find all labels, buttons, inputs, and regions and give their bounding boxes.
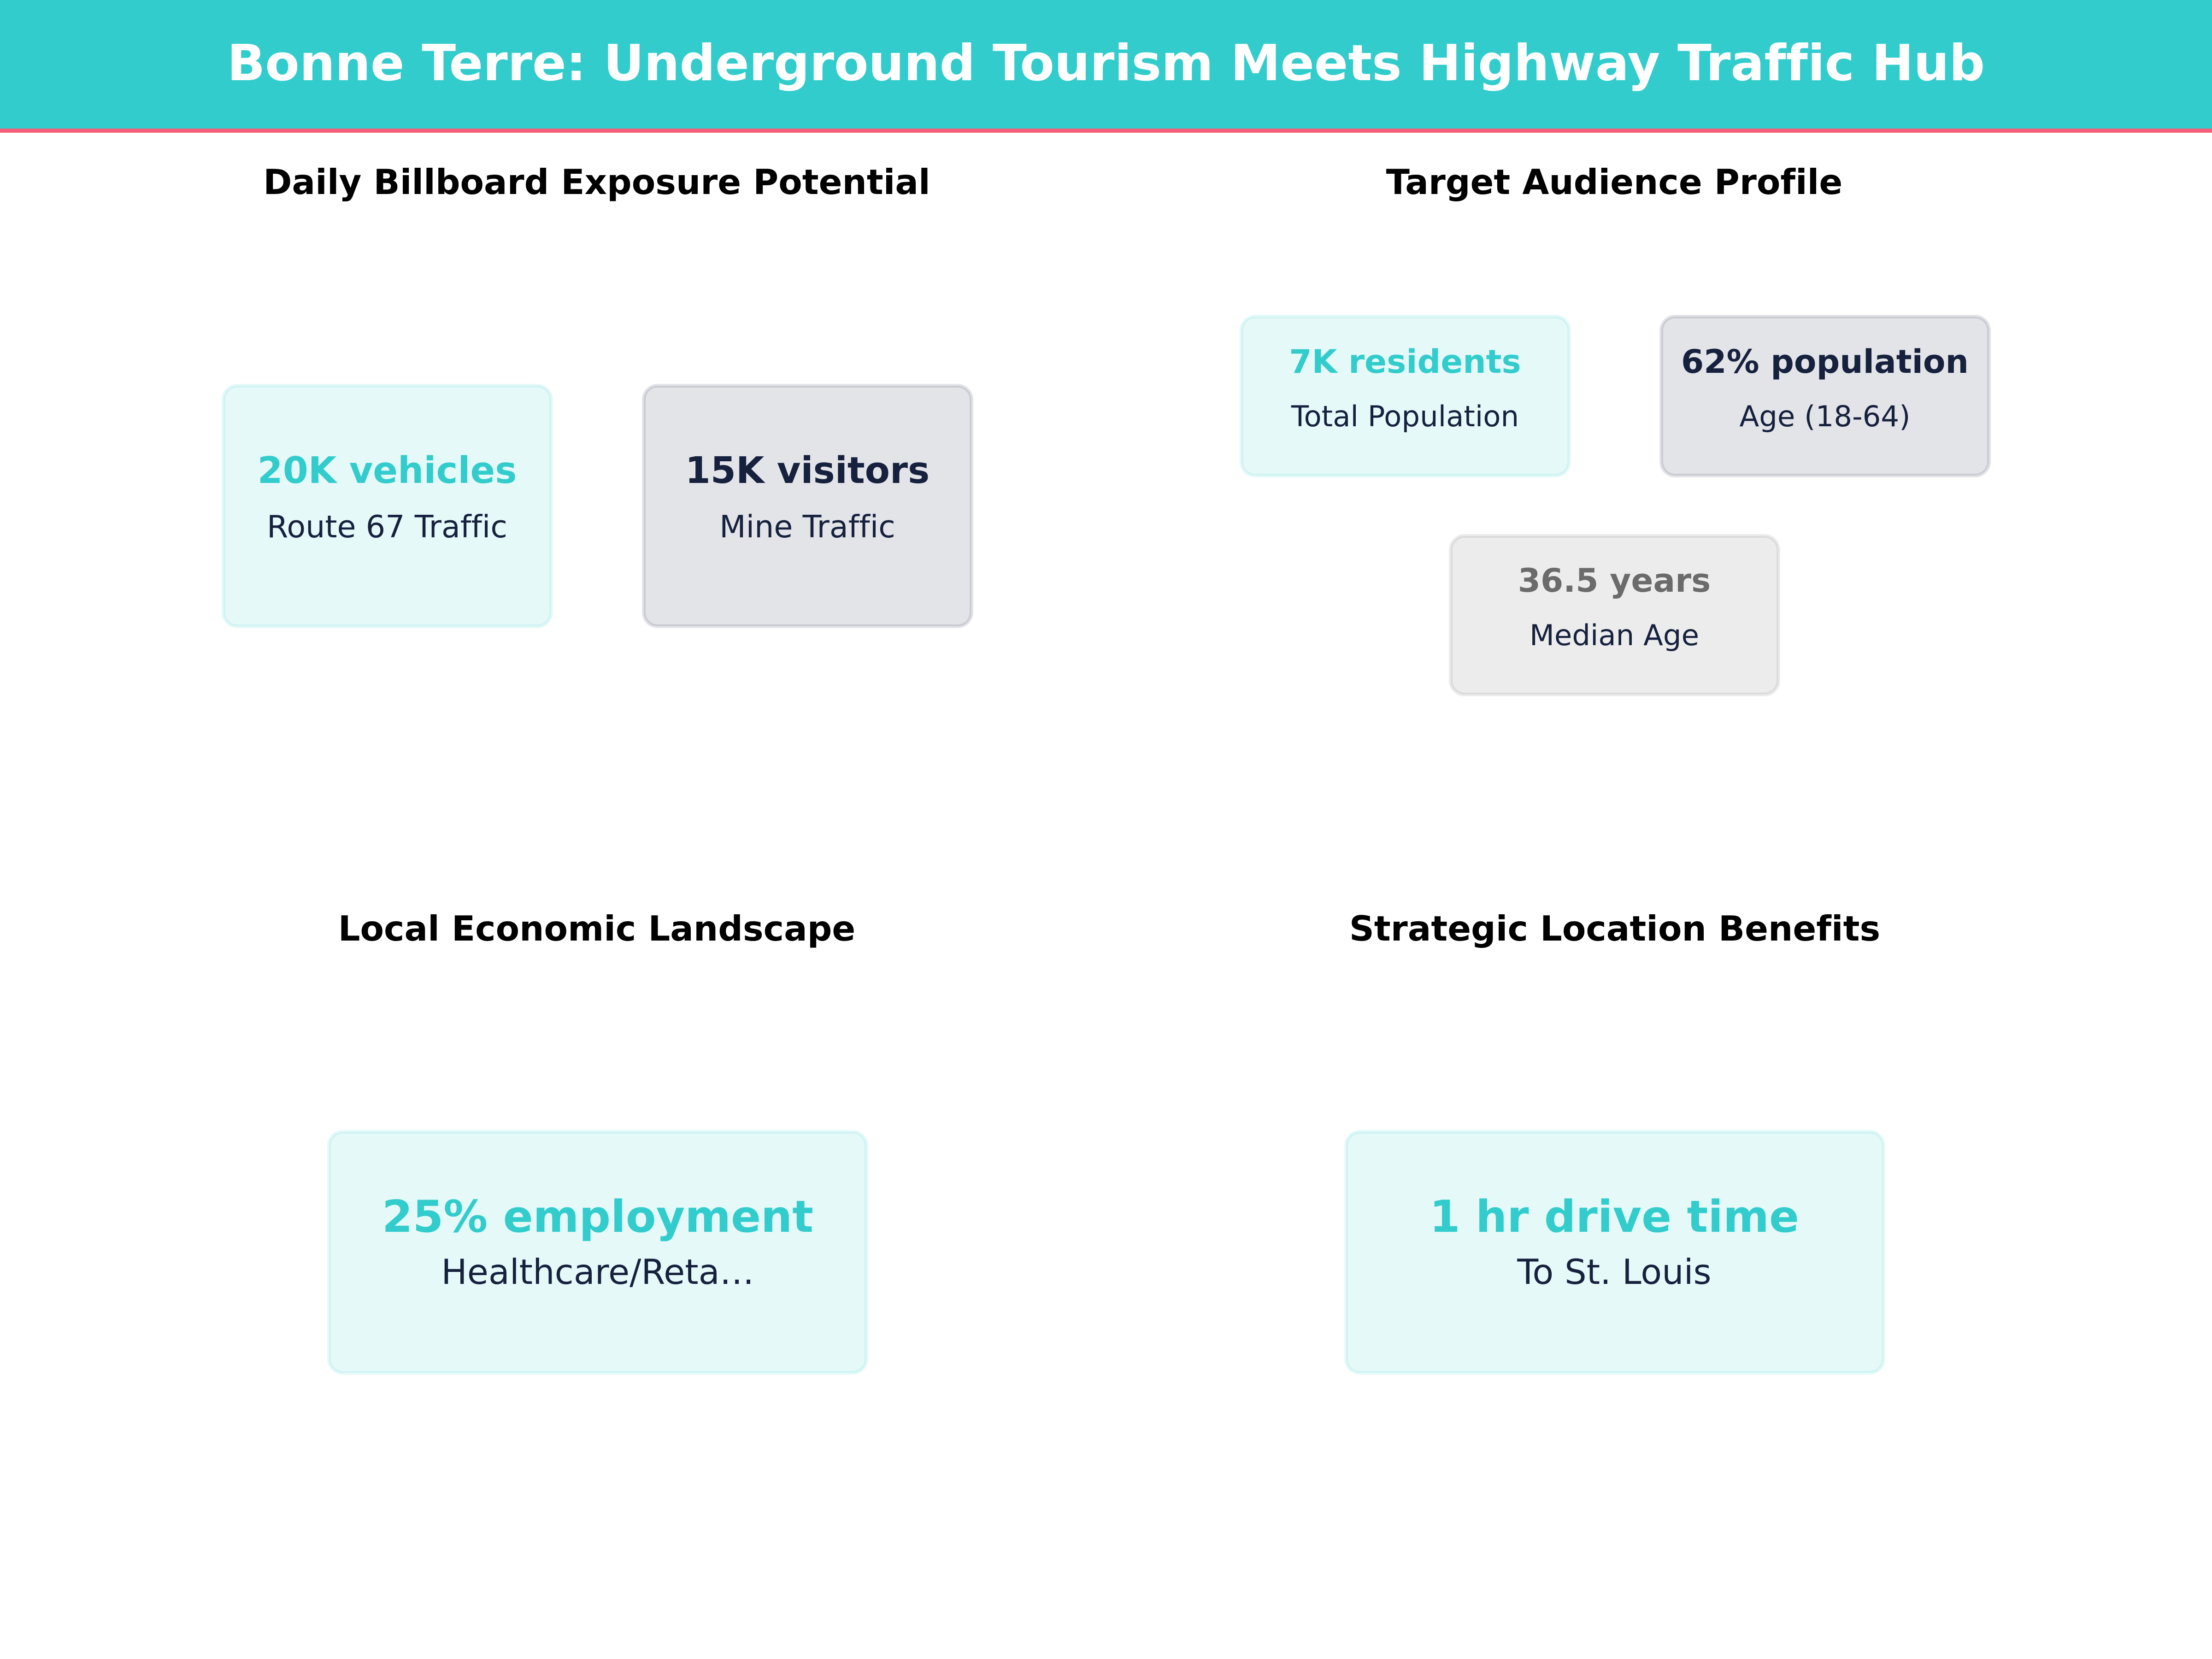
card: employment: Healthcare/Reta… [441,1252,754,1292]
heading: target audience: Target Audience Profile [1386,162,1842,202]
card: working age [1661,317,1989,476]
heading: daily billboard exposure: Daily Billboard Exposure Potential [263,162,930,202]
card: total population: 7K residents [1289,342,1521,381]
card: total population [1241,317,1569,476]
panel: strategic location benefits [1346,908,1883,1373]
card: employment [329,1132,866,1373]
card: mine traffic: Mine Traffic [719,509,895,545]
card: drive time: 1 hr drive time [1430,1191,1799,1242]
heading: local economic: Local Economic Landscape [338,908,855,949]
panel: target audience profile [1241,162,1989,694]
card: route 67 traffic: Route 67 Traffic [267,509,507,545]
card: total population: Total Population [1291,400,1519,433]
card: drive time: To St. Louis [1517,1252,1712,1292]
card: mine traffic: 15K visitors [685,449,930,492]
card: working age: 62% population [1681,342,1969,381]
panel: local economic landscape [329,908,866,1373]
card: employment: 25% employment [382,1191,813,1242]
card: median age: Median Age [1530,618,1699,652]
card: working age: Age (18-64) [1739,400,1911,433]
header banner [0,0,2212,133]
title: Bonne Terre: Underground Tourism Meets Highway Traffic Hub [227,34,1985,92]
panel: daily billboard exposure [224,162,971,626]
card: mine traffic [644,386,971,626]
card: median age: 36.5 years [1518,561,1711,600]
heading: strategic location: Strategic Location Benefits [1349,908,1880,949]
card: drive time [1346,1132,1883,1373]
card: median age [1451,536,1778,694]
card: route 67 traffic: 20K vehicles [258,449,517,492]
card: route 67 traffic [224,386,551,626]
